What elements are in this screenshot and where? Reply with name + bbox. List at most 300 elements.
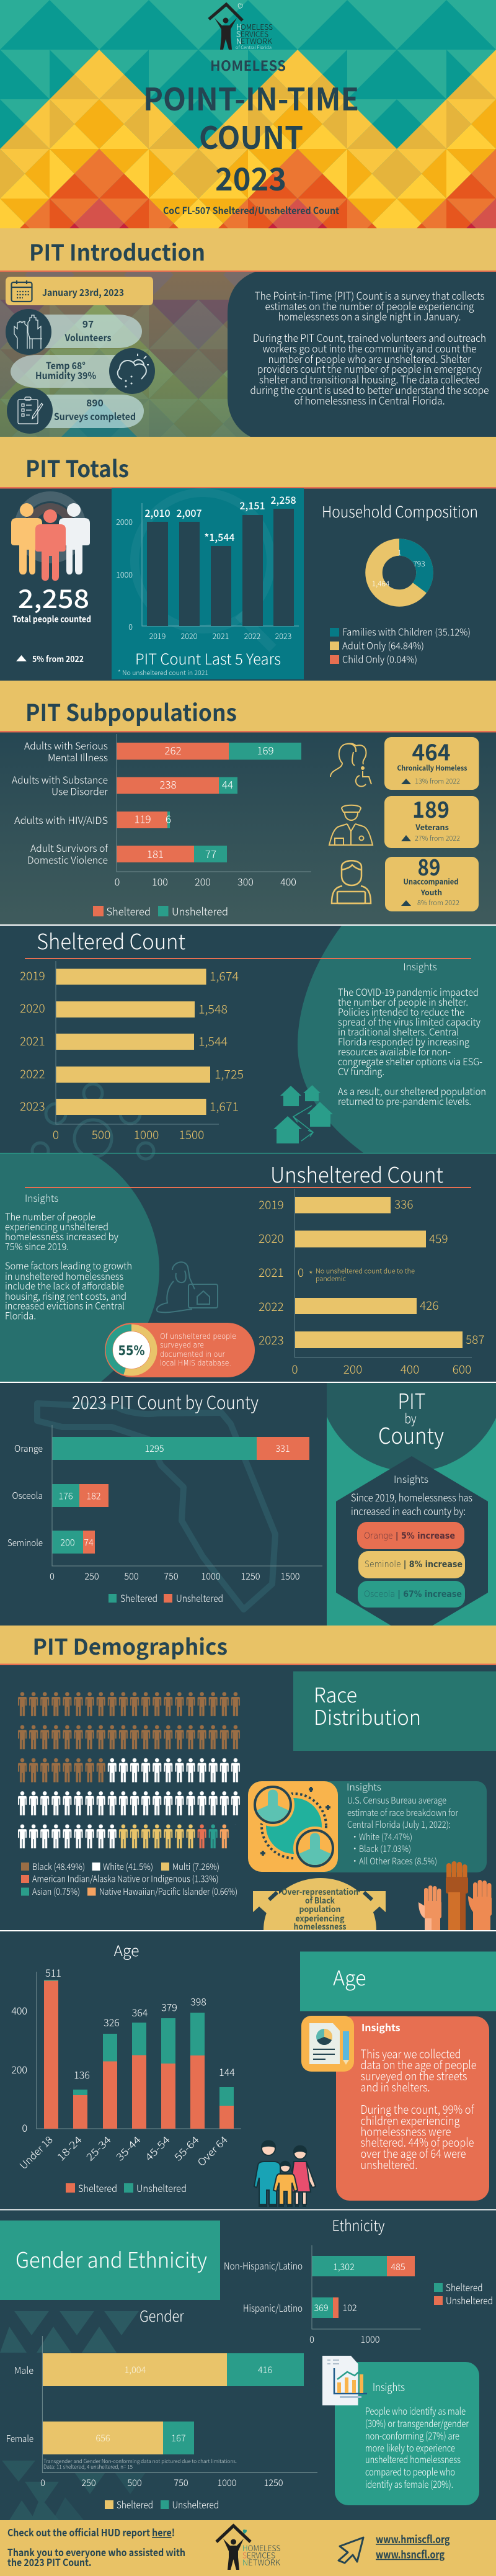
panel: PIT count last 5 years chart: 2021 xyxy=(213,630,229,642)
heading: Gender and Ethnicity: Gender and Ethnicity xyxy=(16,2243,207,2274)
text block: unsheltered insights: increased evictions in Central xyxy=(5,1299,125,1313)
panel: total people counted: 2,258 xyxy=(18,578,89,615)
panel: race insights: Black (17.03%) xyxy=(359,1842,411,1855)
bar chart: subpopulations: Domestic Violence xyxy=(27,852,108,867)
callout: over-representation: homelessness xyxy=(294,1920,347,1932)
panel: gender chart xyxy=(0,2304,317,2520)
heading: Race Distribution: Distribution xyxy=(314,1701,421,1731)
icon: Homeless Services Network logo: ERVICES xyxy=(241,27,268,40)
panel: PIT count by county chart: 1295 xyxy=(144,1442,164,1455)
bar chart: sheltered: 1,544 xyxy=(198,1032,228,1050)
panel: gender chart: 250 xyxy=(81,2476,96,2489)
stat card: chronically homeless xyxy=(384,735,479,790)
heading: Race Distribution: Race xyxy=(314,1679,357,1709)
text block: description: number of people who are unsheltered. Shelter xyxy=(268,351,471,366)
stat card: chronically homeless: 13% from 2022 xyxy=(415,776,460,786)
panel: gender chart: 167 xyxy=(171,2431,186,2444)
panel: gender chart: Transgender and Gender Non-conforming data not pictured due to chart limitations. xyxy=(43,2457,237,2465)
text block: gender insights: non-conforming (27%) are xyxy=(365,2428,459,2443)
callout: over-representation: experiencing xyxy=(295,1912,345,1924)
icon: Homeless Services Network logo: OMELESS xyxy=(241,20,273,32)
panel: race insights xyxy=(248,1779,487,1872)
panel: age chart: 379 xyxy=(161,1999,177,2014)
text block: footer message: Check out the official HUD report here! xyxy=(7,2525,175,2539)
bar chart: unsheltered: 400 xyxy=(401,1361,419,1377)
callout: 55 percent in HMIS: surveyed are xyxy=(160,1340,204,1349)
stat card: veterans: 189 xyxy=(412,792,450,825)
icon: family xyxy=(254,2140,316,2206)
stat card: unaccompanied youth: 89 xyxy=(418,850,440,882)
heading: PIT Totals: PIT Totals xyxy=(25,450,129,484)
icon: Homeless Services Network logo xyxy=(209,4,273,51)
stat card: unaccompanied youth: 8% from 2022 xyxy=(417,898,459,908)
panel: total people counted xyxy=(11,496,91,664)
legend: Asian (0.75%) xyxy=(32,1885,80,1898)
panel: age insights: Insights xyxy=(361,2019,401,2034)
heading: Age xyxy=(300,1952,496,2011)
legend: Unsheltered xyxy=(172,2497,219,2511)
icon: calendar xyxy=(11,280,32,302)
bar chart: sheltered: 1,725 xyxy=(215,1066,244,1082)
panel: date pill: January 23rd, 2023 xyxy=(42,286,124,299)
panel: gender chart: Male xyxy=(14,2364,33,2377)
text block: footer links: www.hsncfl.org xyxy=(376,2546,445,2561)
text block: gender insights: more likely to experience xyxy=(365,2440,455,2454)
text block: gender insights: People who identify as male xyxy=(365,2403,466,2418)
donut chart xyxy=(372,547,425,598)
bar chart: subpopulations: Use Disorder xyxy=(51,783,108,798)
text block: gender insights: compared to people who xyxy=(365,2464,455,2479)
panel: date pill xyxy=(6,277,153,305)
legend xyxy=(105,2497,219,2511)
panel: age chart: Age xyxy=(114,1939,139,1961)
panel: household composition: Household Composition xyxy=(322,500,478,522)
title: COUNT xyxy=(199,114,303,158)
text block: unsheltered insights: Some factors leading to growth xyxy=(5,1259,132,1272)
donut chart: 1,464 xyxy=(372,578,390,589)
panel: PIT count last 5 years chart: 2,010 xyxy=(144,505,170,520)
text block: sheltered insights: Policies intended to reduce the xyxy=(338,1005,464,1019)
panel: header banner xyxy=(0,0,496,228)
panel: age chart: 400 xyxy=(11,2003,27,2018)
bar chart: sheltered: 500 xyxy=(92,1126,110,1143)
icon: up triangle xyxy=(16,655,27,661)
stat card: veterans: 27% from 2022 xyxy=(415,833,460,843)
bar chart: subpopulations: Adults with Substance xyxy=(12,772,108,787)
text block: age insights: unsheltered. xyxy=(361,2156,418,2173)
panel: PIT count by county chart: 0 xyxy=(50,1570,55,1583)
icon: cursor arrow xyxy=(339,2538,363,2563)
text block: sheltered insights: CV funding. xyxy=(338,1065,384,1078)
bar chart: subpopulations: 300 xyxy=(237,874,254,888)
legend xyxy=(66,2180,187,2195)
panel: PIT by county insights: Insights xyxy=(394,1471,428,1486)
stat card: veterans xyxy=(384,792,479,848)
legend: Unsheltered xyxy=(172,903,228,918)
panel: PIT by county insights xyxy=(327,1383,496,1626)
panel: gender chart: Gender xyxy=(140,2304,184,2326)
heading: Gender and Ethnicity xyxy=(0,2220,220,2300)
panel: PIT by county insights: PIT xyxy=(398,1385,425,1415)
panel: age chart: 364 xyxy=(132,2005,148,2019)
text block: age insights: During the count, 99% of xyxy=(361,2101,475,2118)
panel: volunteers stat: Volunteers xyxy=(64,331,112,344)
panel: gender chart: 416 xyxy=(258,2363,272,2376)
icon: person with laptop xyxy=(157,1262,218,1312)
icon: Homeless Services Network logo: H xyxy=(236,20,242,32)
title: POINT-IN-TIME xyxy=(143,75,359,120)
icon: Homeless Services Network logo xyxy=(216,2526,280,2570)
text block: unsheltered insights: include the lack of affordable xyxy=(5,1279,124,1293)
legend xyxy=(21,1860,237,1898)
panel: ethnicity chart: 485 xyxy=(391,2260,405,2273)
bar chart: sheltered xyxy=(20,961,244,1143)
text block: gender insights: (30%) or transgender/gender xyxy=(365,2415,469,2430)
text block: age insights: over the age of 64 were xyxy=(361,2145,466,2162)
panel: sheltered count xyxy=(0,924,496,1159)
panel: age chart: 326 xyxy=(104,2015,120,2029)
text block: footer message: Thank you to everyone who assisted with xyxy=(7,2544,185,2559)
panel: ethnicity chart xyxy=(224,2214,493,2346)
panel: age chart: 511 xyxy=(45,1965,61,1980)
bar chart: subpopulations: 0 xyxy=(115,874,120,888)
text block: sheltered insights: As a result, our sheltered population xyxy=(338,1085,486,1098)
icon: chart document xyxy=(322,2356,367,2405)
bar chart: subpopulations: 200 xyxy=(195,874,211,888)
bar chart: subpopulations: 77 xyxy=(205,846,216,861)
panel: race insights: estimate of race breakdown for xyxy=(347,1806,459,1819)
panel: age chart: 18-24 xyxy=(53,2132,85,2163)
legend: American Indian/Alaska Native or Indigenous (1.33%) xyxy=(32,1872,218,1885)
panel: race insights: Insights xyxy=(347,1779,381,1794)
panel: age chart xyxy=(11,1939,241,2195)
bar chart: sheltered: 2020 xyxy=(20,1000,45,1016)
stat card: unaccompanied youth xyxy=(385,850,479,911)
icon: Homeless Services Network logo: NETWORK xyxy=(242,2556,280,2568)
text block: sheltered insights: spread of the virus limited capacity xyxy=(338,1015,480,1029)
panel: race insights: • xyxy=(350,1842,360,1855)
panel: age chart: Under 18 xyxy=(16,2132,56,2172)
panel: PIT count last 5 years chart: 2000 xyxy=(116,516,133,527)
text block: description: shelter and transitional housing. The data collected xyxy=(259,371,480,387)
bar chart: subpopulations: 400 xyxy=(280,874,296,888)
bar chart: sheltered: 2019 xyxy=(20,967,45,984)
icon: veteran officer xyxy=(329,805,373,845)
bar chart: unsheltered: 0 xyxy=(298,1264,304,1281)
legend xyxy=(108,1591,223,1605)
stat card: unaccompanied youth: Unaccompanied xyxy=(403,876,459,887)
panel: PIT count last 5 years chart xyxy=(112,488,304,679)
heading: Race Distribution xyxy=(293,1671,496,1751)
bar chart: sheltered: 1500 xyxy=(179,1126,204,1143)
panel: age insights xyxy=(301,2016,489,2201)
heading: PIT Subpopulations xyxy=(0,681,496,732)
panel: gender chart: 656 xyxy=(95,2431,110,2444)
bar chart: unsheltered: 2021 xyxy=(259,1264,284,1281)
heading: PIT Totals xyxy=(0,437,496,489)
text block: description: workers go out into the community and count the xyxy=(263,340,476,356)
text block: unsheltered insights: The number of people xyxy=(5,1210,95,1223)
panel: PIT count by county chart: 182 xyxy=(86,1489,101,1503)
text block: footer message: the 2023 PIT Count. xyxy=(7,2554,92,2569)
panel: weather stat: Temp 68° xyxy=(46,359,86,372)
panel: unsheltered count: Unsheltered Count xyxy=(270,1158,443,1189)
bar chart: subpopulations: Mental Illness xyxy=(48,749,108,764)
panel: introduction background xyxy=(0,272,496,437)
title: HOMELESS xyxy=(210,55,286,75)
panel: age chart: Over 64 xyxy=(193,2132,231,2169)
donut chart: 1 xyxy=(397,547,402,558)
bar chart: subpopulations: 262 xyxy=(164,742,182,758)
bar chart: sheltered: 1,548 xyxy=(198,1000,228,1017)
legend: Black (48.49%) xyxy=(32,1860,85,1873)
icon: raised hands xyxy=(418,1861,492,1930)
panel: gender chart: 1250 xyxy=(264,2476,283,2489)
text block: sheltered insights: Insights xyxy=(403,960,437,973)
icon: cloud and sun xyxy=(118,354,149,387)
legend: Unsheltered xyxy=(176,1591,223,1605)
panel: gender chart: 0 xyxy=(40,2476,45,2489)
panel: race insights: • xyxy=(350,1854,360,1867)
panel: age chart: 398 xyxy=(190,1994,206,2009)
text block: unsheltered insights: experiencing unsheltered xyxy=(5,1220,108,1233)
panel: ethnicity chart: 369 xyxy=(314,2301,329,2314)
panel: race insights: U.S. Census Bureau average xyxy=(347,1794,446,1807)
panel: ethnicity chart: Hispanic/Latino xyxy=(243,2300,303,2315)
panel: subpopulations xyxy=(0,732,496,924)
bar chart: subpopulations: Adult Survivors of xyxy=(30,840,108,855)
text block: description: homelessness on a single night in January. xyxy=(278,308,461,324)
panel: PIT count last 5 years chart: PIT Count Last 5 Years xyxy=(135,647,281,669)
panel: PIT count by county chart: Orange xyxy=(14,1442,43,1455)
legend xyxy=(93,903,228,918)
text block: sheltered insights xyxy=(338,960,486,1108)
pill: Osceola xyxy=(358,1581,465,1608)
panel: unsheltered count xyxy=(0,1153,496,1383)
text block: footer message xyxy=(7,2525,185,2569)
text block: unsheltered insights: housing, rising rent costs, and xyxy=(5,1289,126,1303)
panel: age chart: 144 xyxy=(219,2064,235,2079)
heading: PIT Introduction: PIT Introduction xyxy=(29,235,205,267)
text block: description xyxy=(250,287,489,408)
text block: age insights: surveyed on the streets xyxy=(361,2067,467,2084)
bar chart: unsheltered xyxy=(259,1189,485,1377)
panel: PIT count last 5 years chart: 2022 xyxy=(244,630,261,642)
panel: gender chart: 750 xyxy=(174,2476,188,2489)
text block: unsheltered insights: 75% since 2019. xyxy=(5,1240,69,1253)
panel: ethnicity chart: 1000 xyxy=(360,2333,380,2346)
panel: PIT count last 5 years chart: 2,151 xyxy=(239,498,265,512)
panel: race insights: Central Florida (July 1, 2022): xyxy=(347,1818,451,1831)
panel: PIT count by county chart: 1500 xyxy=(280,1570,300,1583)
heading: PIT Subpopulations: PIT Subpopulations xyxy=(25,694,237,728)
panel: age chart: 200 xyxy=(11,2062,27,2077)
panel: surveys stat: 890 xyxy=(86,396,104,409)
panel: PIT count by county chart: 2023 PIT Count by County xyxy=(72,1389,259,1415)
panel: volunteers stat: 97 xyxy=(82,317,94,331)
callout: over-representation: population xyxy=(299,1902,341,1915)
callout: 55 percent in HMIS: documented in our xyxy=(160,1349,226,1359)
panel: gender chart: 1,004 xyxy=(125,2363,146,2376)
panel: race insights: White (74.47%) xyxy=(359,1830,412,1843)
text block: unsheltered insights: in unsheltered homelessness xyxy=(5,1269,123,1283)
panel: weather stat: Humidity 39% xyxy=(35,369,96,382)
text block: footer links: www.hmiscfl.org xyxy=(376,2531,450,2546)
bar chart: sheltered: 1000 xyxy=(134,1126,159,1143)
callout: over-representation xyxy=(253,1878,386,1932)
title xyxy=(143,55,359,217)
text block: unsheltered insights xyxy=(5,1191,132,1323)
panel: race insights: • xyxy=(350,1830,360,1843)
panel: PIT by county insights: by xyxy=(404,1409,417,1428)
panel: PIT count last 5 years chart: * No unsheltered count in 2021 xyxy=(118,668,208,678)
panel: age chart: 136 xyxy=(74,2067,90,2082)
panel: surveys stat xyxy=(7,388,144,434)
icon: three people xyxy=(11,496,90,581)
heading: PIT Introduction xyxy=(0,228,496,272)
text block: gender insights xyxy=(365,2403,469,2491)
bar chart: unsheltered: 200 xyxy=(343,1361,362,1377)
panel: PIT count by county chart: 1000 xyxy=(201,1570,221,1583)
panel: PIT count by county chart: 74 xyxy=(84,1536,94,1549)
legend: Adult Only (64.84%) xyxy=(342,639,424,653)
panel: total people counted: Total people counted xyxy=(12,613,91,625)
legend: Families with Children (35.12%) xyxy=(342,625,471,639)
callout: 55 percent in HMIS: 55% xyxy=(118,1343,145,1358)
text block: sheltered insights: congregate shelter options via ESG- xyxy=(338,1055,482,1068)
icon: two people with wheelchair xyxy=(330,743,371,787)
callout: 55 percent in HMIS: local HMIS database. xyxy=(160,1358,231,1367)
text block: age insights: This year we collected xyxy=(361,2045,461,2062)
icon: Homeless Services Network logo: of Central Florida xyxy=(236,45,272,51)
panel: PIT count by county chart: 331 xyxy=(275,1442,290,1455)
icon: clipboard xyxy=(18,397,43,424)
panel: gender insights: Insights xyxy=(373,2379,405,2395)
pill: Orange xyxy=(357,1522,464,1549)
text block: footer links xyxy=(376,2531,450,2561)
donut chart: 793 xyxy=(413,558,425,569)
panel: gender chart: 500 xyxy=(127,2476,142,2489)
bar chart: unsheltered: 600 xyxy=(453,1361,471,1377)
panel: age chart: 0 xyxy=(22,2120,27,2135)
text block: age insights: sheltered. 44% of people xyxy=(361,2134,474,2150)
text block: unsheltered insights: Insights xyxy=(25,1191,58,1205)
text block: sheltered insights: returned to pre-pandemic levels. xyxy=(338,1094,471,1108)
bar chart: unsheltered: * xyxy=(309,1268,313,1281)
callout: over-representation: Over-representation xyxy=(281,1885,358,1897)
bar chart: subpopulations: Adults with Serious xyxy=(24,738,108,753)
text block: description: of homelessness in Central Florida. xyxy=(294,392,445,408)
icon: connected people xyxy=(248,1781,338,1872)
panel: sheltered count: Sheltered Count xyxy=(37,925,185,955)
bar chart: unsheltered: 459 xyxy=(429,1230,448,1247)
icon: unaccompanied youth xyxy=(332,861,371,903)
text block: age insights xyxy=(361,2045,476,2173)
heading: Age: Age xyxy=(333,1962,366,1992)
panel: PIT count last 5 years chart: 1000 xyxy=(116,568,133,580)
text block: gender insights: identify as female (20%). xyxy=(365,2476,453,2491)
panel: PIT count by county chart: 176 xyxy=(58,1489,73,1503)
bar chart xyxy=(147,509,294,626)
bar chart: subpopulations xyxy=(12,734,311,888)
legend: Child Only (0.04%) xyxy=(342,653,417,666)
text block: sheltered insights: in traditional shelters. Central xyxy=(338,1025,459,1039)
text block: sheltered insights: The COVID-19 pandemic impacted xyxy=(338,985,479,999)
panel: volunteers stat xyxy=(6,309,142,355)
bar chart: unsheltered: 2020 xyxy=(259,1230,284,1246)
panel: total people counted: 5% from 2022 xyxy=(32,652,84,664)
bar chart: unsheltered: 426 xyxy=(420,1297,439,1313)
text block: description: estimates on the number of people experiencing xyxy=(265,298,474,313)
bar chart: subpopulations: 6 xyxy=(166,810,171,826)
panel: weather stat xyxy=(11,348,155,394)
bar chart: subpopulations: 169 xyxy=(257,742,274,758)
panel: household composition xyxy=(322,500,478,666)
icon: report document xyxy=(301,2016,354,2072)
panel: ethnicity chart: 102 xyxy=(342,2301,357,2314)
legend: Native Hawaiian/Pacific Islander (0.66%) xyxy=(99,1885,237,1898)
panel: age chart: 35-44 xyxy=(112,2132,144,2163)
panel: PIT count by county chart: 250 xyxy=(84,1570,99,1583)
panel: race distribution pictogram xyxy=(17,1692,241,1898)
panel: age chart: 55-64 xyxy=(170,2132,202,2163)
panel: PIT count last 5 years chart: 2,007 xyxy=(176,505,202,520)
bar chart: unsheltered: No unsheltered count due to the xyxy=(316,1266,415,1276)
text block: sheltered insights: Florida responded by increasing xyxy=(338,1035,470,1049)
panel: PIT description xyxy=(228,272,496,437)
text block: sheltered insights: the number of people in shelter. xyxy=(338,995,468,1009)
bar chart: subpopulations: 100 xyxy=(152,874,168,888)
bar chart: subpopulations: 119 xyxy=(134,810,151,826)
panel: PIT by county insights: increased in each county by: xyxy=(351,1503,466,1518)
callout: over-representation: of Black xyxy=(305,1894,335,1906)
stat card: unaccompanied youth: Youth xyxy=(420,887,442,898)
text block: age insights: children experiencing xyxy=(361,2112,460,2129)
panel: ethnicity chart: 1,302 xyxy=(333,2260,355,2273)
bar chart: sheltered: 2023 xyxy=(20,1098,45,1114)
bar chart: unsheltered: 2019 xyxy=(259,1196,284,1213)
heading: PIT Demographics xyxy=(0,1626,496,1665)
bar chart: subpopulations: 238 xyxy=(159,776,177,792)
panel: age chart: 25-34 xyxy=(82,2132,114,2163)
pill: Seminole xyxy=(358,1551,465,1578)
icon: Homeless Services Network logo: S xyxy=(236,27,241,40)
bar chart: unsheltered: 2023 xyxy=(259,1331,284,1348)
text block: age insights: data on the age of people xyxy=(361,2056,476,2073)
panel: race insights: All Other Races (8.5%) xyxy=(359,1854,437,1867)
panel: PIT count by county chart: Seminole xyxy=(7,1536,43,1549)
legend: Sheltered xyxy=(107,903,151,918)
legend: Multi (7.26%) xyxy=(172,1860,219,1873)
panel: gender chart: 1000 xyxy=(217,2476,237,2489)
callout: 55 percent in HMIS xyxy=(105,1323,255,1377)
icon: houses with arrows xyxy=(273,1085,333,1143)
panel: surveys stat: Surveys completed xyxy=(54,409,136,423)
icon: Homeless Services Network logo: SERVICES xyxy=(242,2549,275,2561)
bar chart: sheltered: 0 xyxy=(53,1126,59,1143)
icon: Homeless Services Network logo: ETWORK xyxy=(241,35,272,47)
panel: PIT count by county chart: 1250 xyxy=(241,1570,260,1583)
bar chart: subpopulations: 44 xyxy=(222,776,233,792)
legend: Sheltered xyxy=(117,2497,153,2511)
bar chart: unsheltered: 2022 xyxy=(259,1298,284,1315)
bar chart: sheltered: 2022 xyxy=(20,1065,45,1082)
icon: Homeless Services Network logo: N xyxy=(236,35,242,47)
panel: PIT count last 5 years chart: *1,544 xyxy=(205,529,234,544)
panel: PIT count last 5 years chart: 0 xyxy=(128,620,133,632)
text block: description: providers count the number of people in emergency xyxy=(257,360,482,376)
bar chart: unsheltered: 587 xyxy=(466,1331,485,1348)
